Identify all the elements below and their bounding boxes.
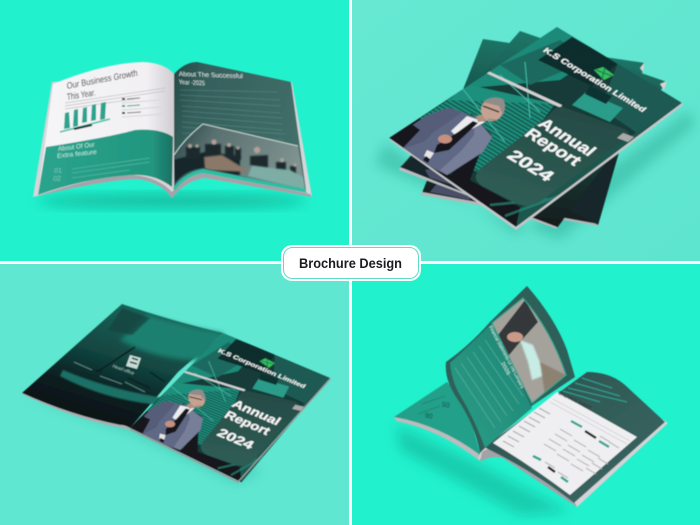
cover title Report: Report: [521, 125, 586, 169]
top cover artwork: [389, 27, 682, 227]
background: top-right panel: [351, 0, 700, 262]
cover company name: K.S Corporation Limited: [541, 46, 648, 114]
bottom cover: [421, 39, 645, 226]
balance sheet heading: BALANCE SHEET: [557, 390, 592, 412]
QR code: [126, 355, 141, 369]
table values: [544, 429, 619, 478]
back left page: [394, 382, 480, 461]
background: bottom-left panel: [0, 264, 350, 525]
front cover artwork: [104, 323, 360, 493]
left page paragraph: [65, 88, 165, 109]
left page heading: This Year.: [67, 87, 96, 102]
back cover contact text: [74, 362, 145, 392]
left page heading: [66, 68, 138, 102]
row labels: [503, 408, 550, 447]
cover edge highlight: [389, 103, 683, 230]
right page block: [484, 372, 665, 503]
raised page: [446, 286, 575, 453]
cover title Annual: Annual: [534, 115, 600, 159]
teal section heading: [57, 141, 97, 160]
teal section list: 02: [53, 176, 61, 183]
right page heading: Year -2025: [179, 79, 205, 87]
right dark page: [174, 62, 306, 190]
teal section list: [53, 158, 150, 183]
panel: stacked annual reports top-right: [375, 27, 695, 240]
chart legend: [122, 98, 163, 117]
group photo with handshake: [174, 122, 306, 190]
raised page heading: [487, 325, 526, 390]
teal text lines on dark page: [563, 378, 627, 402]
photo of hand with sparkles: [491, 296, 568, 404]
cover company name: K.S Corporation Limited: [216, 348, 307, 390]
back cover contact text: Head office: [111, 364, 136, 376]
right page heading: [179, 71, 244, 87]
background: bottom-right panel: [351, 264, 700, 525]
panel: open brochure bottom-right: [394, 286, 668, 515]
left teal section: [38, 130, 173, 195]
cover title Annual: Annual: [229, 397, 284, 428]
cover title 2024: 2024: [503, 147, 558, 185]
badge label: Brochure Design: [299, 255, 402, 271]
book edge: [478, 372, 668, 507]
cover title 2024: 2024: [214, 426, 257, 452]
raised page heading: Financial Statements Of The Company: [487, 325, 526, 390]
balance sheet page: [493, 390, 637, 495]
back cover swoosh: [60, 370, 165, 405]
back cover building: [95, 347, 165, 388]
table header tags: [571, 421, 582, 427]
badge: Brochure Design: [281, 245, 421, 281]
left page heading: Our Business Growth: [66, 68, 138, 91]
back left page: 06: [424, 411, 433, 419]
back cover: [22, 304, 223, 428]
cover title Report: Report: [222, 408, 274, 437]
back left page: 05: [441, 400, 450, 408]
teal section heading: About Of Our: [58, 141, 96, 153]
teal section list: 01: [54, 168, 62, 175]
bar chart: [60, 102, 110, 132]
teal section heading: Extra feature: [57, 149, 97, 160]
background: top-left panel: [0, 0, 350, 262]
panel: open brochure top-left: [33, 62, 312, 208]
back cover green arc: [120, 315, 223, 360]
right page heading: About The Successful: [179, 71, 244, 80]
page edges: [33, 74, 312, 198]
middle cover: [399, 31, 667, 229]
panel: flat open cover bottom-left: [22, 304, 360, 493]
raised page heading: 2025: [499, 361, 511, 377]
right page text lines: [180, 90, 285, 140]
teal swoosh band: [173, 169, 307, 193]
raised page text lines: [455, 340, 523, 428]
page paragraph: [550, 399, 630, 444]
left white page: [38, 62, 174, 195]
